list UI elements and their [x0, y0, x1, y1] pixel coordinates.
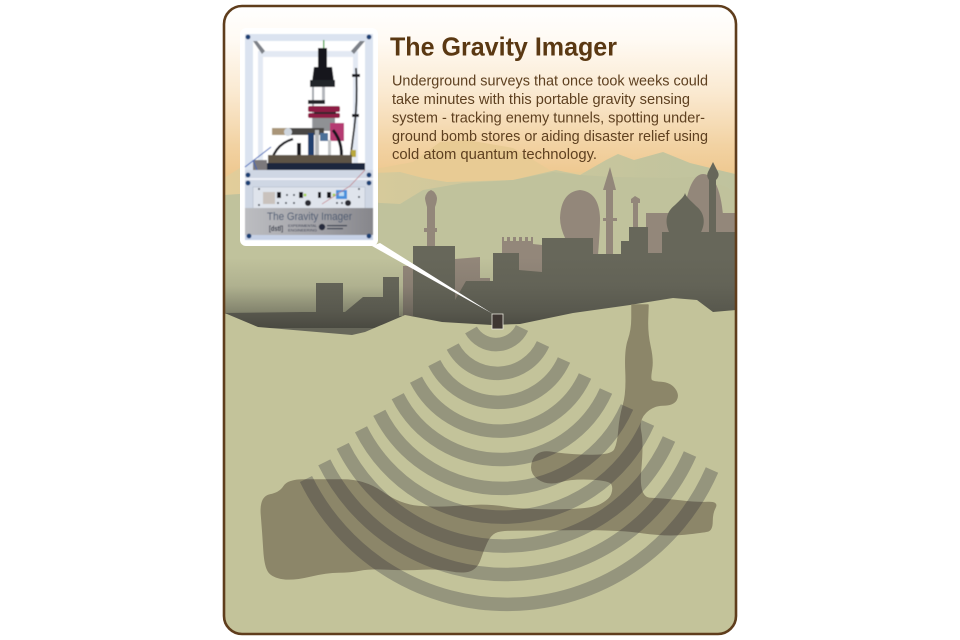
ground shadow gradient — [225, 272, 734, 328]
near hills — [225, 172, 574, 316]
name plate: The Gravity Imager — [267, 211, 352, 223]
block: right — [646, 213, 736, 255]
underground soil — [224, 298, 736, 640]
middle hills — [225, 152, 735, 204]
gravity sensing rings — [306, 328, 712, 604]
description text: ground bomb stores or aiding disaster relief using — [392, 129, 708, 145]
crenellated castle — [502, 237, 542, 272]
name plate: ENGINEERING — [288, 228, 317, 232]
minaret: small — [631, 196, 640, 227]
name plate — [245, 208, 373, 235]
description text: cold atom quantum technology. — [392, 147, 597, 163]
title: The Gravity Imager — [390, 32, 617, 62]
frame — [258, 51, 358, 170]
distant hills — [418, 140, 530, 182]
dome: right — [687, 174, 723, 213]
tower: centre — [455, 257, 490, 300]
photo border — [240, 28, 378, 246]
name plate: EXPERIMENTAL — [288, 224, 317, 228]
device photo — [245, 34, 373, 240]
outer frame — [224, 6, 736, 634]
instrument — [253, 40, 365, 170]
minaret: left — [424, 190, 437, 247]
sky background — [225, 30, 735, 178]
minaret: central — [603, 167, 617, 255]
panel: illustrated scene — [224, 6, 736, 640]
building: left — [316, 283, 343, 312]
frame bolts — [246, 35, 371, 238]
callout pointer — [372, 243, 493, 314]
control panel — [245, 170, 373, 236]
dome: central — [560, 190, 600, 255]
description text — [392, 74, 708, 163]
back buildings — [403, 167, 736, 316]
ground mass — [224, 227, 736, 340]
blue cable — [245, 147, 271, 196]
description text: Underground surveys that once took weeks could — [392, 74, 708, 90]
name plate: [dstl] — [269, 224, 283, 233]
dome: onion — [667, 193, 704, 234]
gravity sensor device — [492, 314, 503, 329]
dark foreground skyline — [224, 162, 736, 340]
description text: system - tracking enemy tunnels, spotting under- — [392, 110, 705, 126]
underground tunnels — [261, 305, 716, 579]
description text: take minutes with this portable gravity sensing — [392, 92, 690, 108]
photo card: The Gravity Imager device — [240, 28, 378, 246]
minaret: right — [707, 162, 719, 234]
tower: left — [403, 266, 413, 316]
